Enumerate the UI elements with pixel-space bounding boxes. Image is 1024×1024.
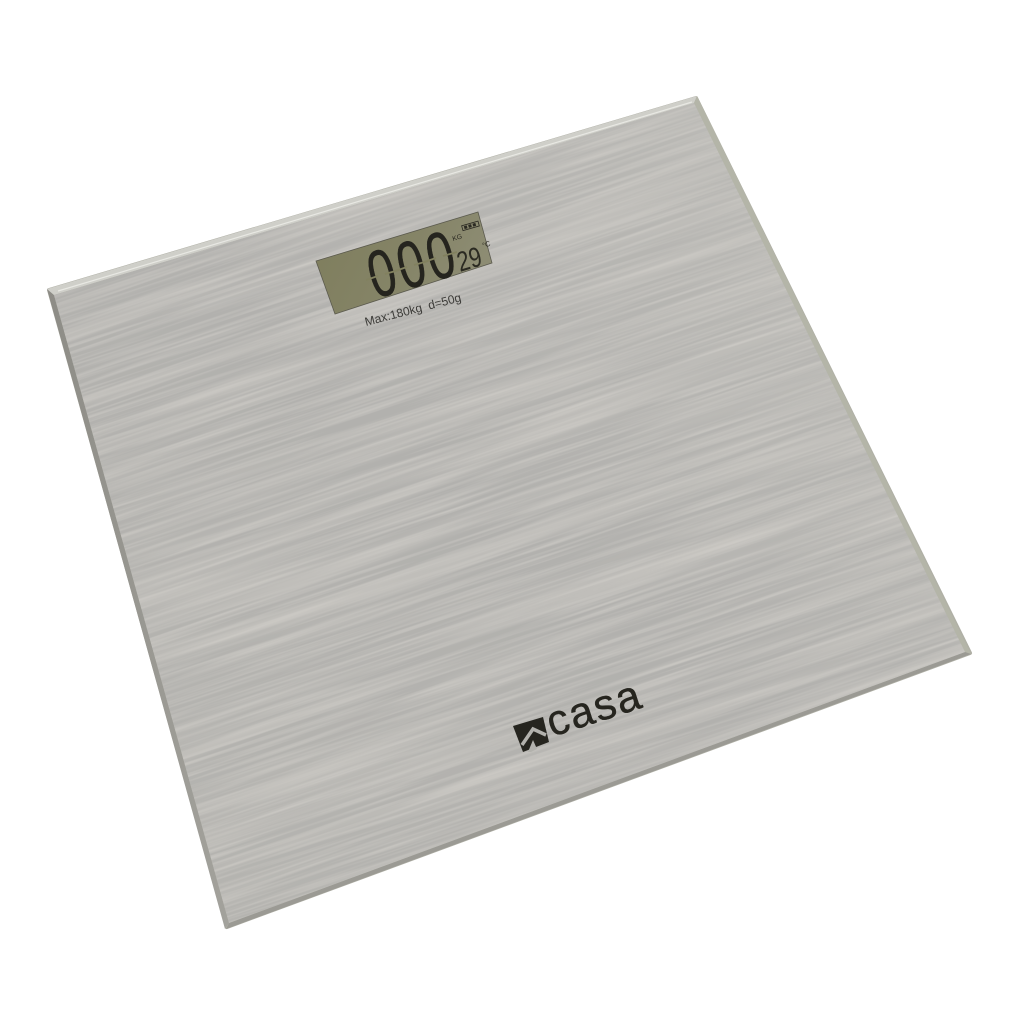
temperature reading: 29 (454, 241, 485, 278)
LCD screen (316, 212, 492, 314)
battery indicator (462, 221, 479, 231)
logo icon (513, 717, 549, 752)
top bevel (47, 96, 697, 295)
LCD display (316, 212, 492, 314)
top highlight line (58, 102, 692, 291)
glass face (54, 103, 965, 923)
product: glass bathroom scale (47, 96, 972, 930)
casa logo (513, 671, 648, 752)
unit label: KG (452, 233, 463, 243)
LCD segment gaps (366, 252, 457, 280)
LCD main reading: 000 (360, 216, 467, 313)
left bevel (47, 289, 229, 929)
logo wordmark: casa (540, 671, 648, 747)
capacity label: Max:180kg d=50g (363, 290, 463, 329)
right bevel (694, 96, 971, 654)
brushed stripe texture (54, 105, 965, 922)
glass outer edge (49, 98, 970, 927)
temperature unit: °C (481, 239, 491, 250)
scale body (47, 96, 972, 930)
bottom bevel (226, 652, 971, 929)
